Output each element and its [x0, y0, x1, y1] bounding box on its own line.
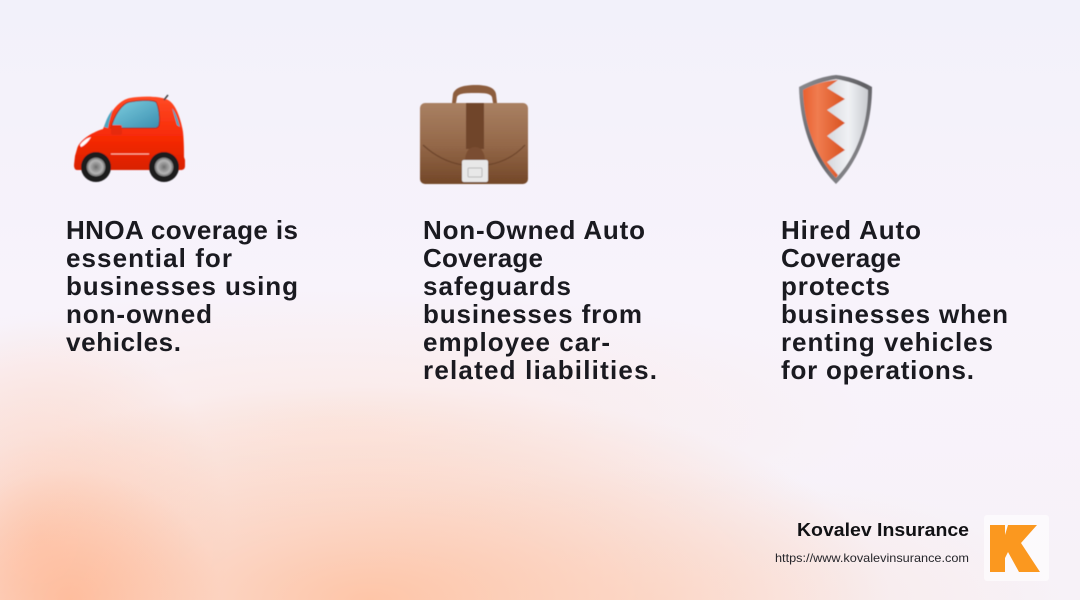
text block: HNOA coverage: vehicles.: [66, 327, 181, 357]
text block: Hired Auto Coverage: for operations.: [781, 355, 974, 385]
icon: shield: [799, 75, 872, 184]
text block: HNOA coverage: businesses using: [66, 271, 298, 301]
company name: Kovalev Insurance: [797, 520, 969, 540]
text block: Non-Owned Auto Coverage: [423, 215, 657, 385]
text block: Hired Auto Coverage: Coverage: [781, 243, 901, 273]
text block: HNOA coverage: HNOA coverage is: [66, 215, 298, 245]
text block: Non-Owned Auto Coverage: employee car-: [423, 327, 610, 357]
logo: K: [984, 515, 1049, 581]
text block: Non-Owned Auto Coverage: businesses from: [423, 299, 642, 329]
text block: Hired Auto Coverage: businesses when: [781, 299, 1008, 329]
website url: https://www.kovalevinsurance.com: [775, 551, 969, 565]
text block: Non-Owned Auto Coverage: related liabilities.: [423, 355, 657, 385]
icon: briefcase: [420, 85, 528, 184]
text block: HNOA coverage: non-owned: [66, 299, 212, 329]
text block: Non-Owned Auto Coverage: safeguards: [423, 271, 571, 301]
text block: Non-Owned Auto Coverage: Non-Owned Auto: [423, 215, 645, 245]
text block: Hired Auto Coverage: Hired Auto: [781, 215, 921, 245]
text block: Hired Auto Coverage: renting vehicles: [781, 327, 993, 357]
text block: Hired Auto Coverage: [781, 215, 1008, 385]
text block: HNOA coverage: [66, 215, 298, 357]
text block: Non-Owned Auto Coverage: Coverage: [423, 243, 543, 273]
text block: HNOA coverage: essential for: [66, 243, 232, 273]
icon: red car: [74, 95, 185, 182]
text block: Hired Auto Coverage: protects: [781, 271, 890, 301]
